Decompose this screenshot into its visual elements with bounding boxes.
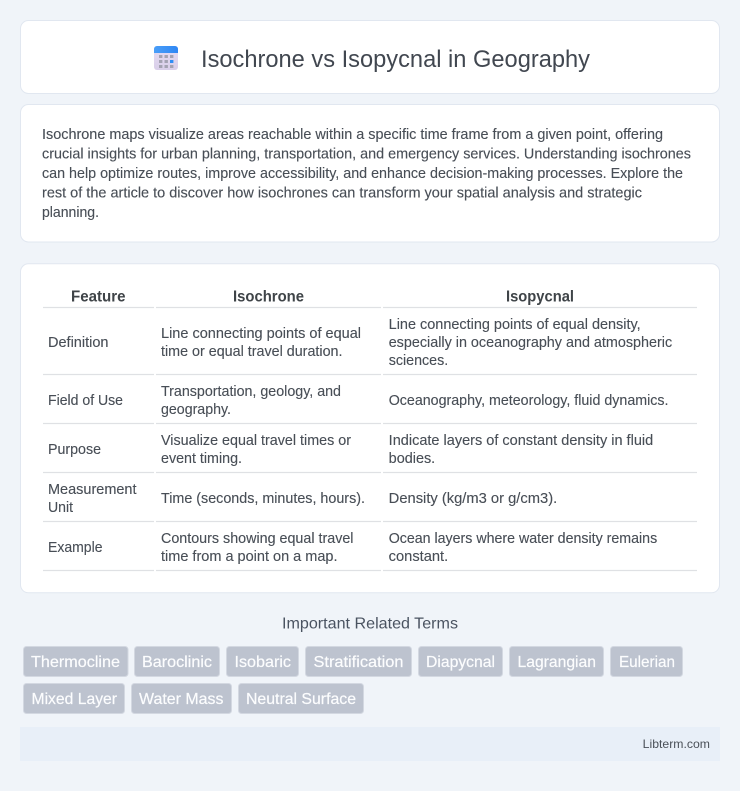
row: definition: time or equal travel duration. <box>161 344 342 360</box>
tag: Lagrangian <box>510 646 604 676</box>
tag: Water Mass <box>132 684 232 714</box>
row: example: Example <box>48 540 102 556</box>
row: purpose: Visualize equal travel times or <box>161 433 351 449</box>
row: measurement unit <box>48 482 557 516</box>
tag: Stratification <box>306 646 412 676</box>
row: example: time from a point on a map. <box>161 549 338 565</box>
panel: comparison table <box>20 264 720 593</box>
row: definition: Definition <box>48 335 108 351</box>
row: definition <box>48 317 672 369</box>
tag: Water Mass: Water Mass <box>139 691 224 708</box>
panel: title header <box>20 20 720 94</box>
footer bar <box>20 727 720 761</box>
row: purpose: event timing. <box>161 451 242 467</box>
tag: Thermocline <box>24 646 128 676</box>
intro paragraph <box>42 127 691 221</box>
tag: Mixed Layer: Mixed Layer <box>32 691 118 708</box>
intro paragraph: crucial insights for urban planning, transportation, and emergency services. Understanding isochrones <box>42 146 691 162</box>
table header row <box>71 289 574 306</box>
intro paragraph: planning. <box>42 205 99 221</box>
tag: Baroclinic <box>134 646 220 676</box>
row: definition: Line connecting points of equal density, <box>389 317 641 333</box>
panel: introduction <box>20 104 720 242</box>
table rules <box>43 308 697 570</box>
row: purpose <box>48 433 653 467</box>
table header row: Isochrone <box>233 289 304 306</box>
row: purpose: Purpose <box>48 442 101 458</box>
row: measurement unit: Density (kg/m3 or g/cm3). <box>389 491 557 507</box>
row: field of use: Field of Use <box>48 393 123 409</box>
row: field of use <box>48 384 668 418</box>
row: field of use: Transportation, geology, and <box>161 384 341 400</box>
row: definition: especially in oceanography and atmospheric <box>389 335 672 351</box>
row: example: constant. <box>389 549 448 565</box>
row: field of use: Oceanography, meteorology, fluid dynamics. <box>389 393 668 409</box>
tag: Eulerian: Eulerian <box>619 654 675 671</box>
icon: calendar <box>154 46 178 70</box>
row: purpose: Indicate layers of constant density in fluid <box>389 433 653 449</box>
tag: Baroclinic: Baroclinic <box>142 654 212 671</box>
tag: Mixed Layer <box>24 684 124 714</box>
heading: important related terms: Important Related Terms <box>282 616 458 632</box>
intro paragraph: Isochrone maps visualize areas reachable within a specific time frame from a given point, offering <box>42 127 663 143</box>
title: Isochrone vs Isopycnal in Geography <box>201 46 590 73</box>
tag: Neutral Surface: Neutral Surface <box>246 691 356 708</box>
tags: related terms <box>24 646 682 714</box>
row: measurement unit: Unit <box>48 500 73 516</box>
tag: Neutral Surface <box>238 684 364 714</box>
table header row: Feature <box>71 289 126 306</box>
row: example: Ocean layers where water density remains <box>389 531 657 547</box>
tag: Isobaric: Isobaric <box>234 654 291 671</box>
intro paragraph: rest of the article to discover how isochrones can transform your spatial analysis and strategic <box>42 186 642 202</box>
tag: Diapycnal <box>418 646 502 676</box>
tag: Thermocline: Thermocline <box>31 654 120 671</box>
row: example: Contours showing equal travel <box>161 531 354 547</box>
tag: Diapycnal: Diapycnal <box>426 654 495 671</box>
row: definition: Line connecting points of equal <box>161 326 361 342</box>
tag: Isobaric <box>226 646 298 676</box>
tag: Lagrangian: Lagrangian <box>518 654 596 671</box>
intro paragraph: can help optimize routes, improve accessibility, and enhance decision-making processes. Explore the <box>42 166 683 182</box>
row: measurement unit: Time (seconds, minutes, hours). <box>161 491 365 507</box>
row: measurement unit: Measurement <box>48 482 136 498</box>
table header row: Isopycnal <box>506 289 574 306</box>
row: definition: sciences. <box>389 353 448 369</box>
row: field of use: geography. <box>161 402 231 418</box>
tag: Stratification: Stratification <box>314 654 404 671</box>
row: purpose: bodies. <box>389 451 435 467</box>
tag: Eulerian <box>610 646 682 676</box>
row: example <box>48 531 657 565</box>
footer credit: Libterm.com <box>643 737 710 751</box>
